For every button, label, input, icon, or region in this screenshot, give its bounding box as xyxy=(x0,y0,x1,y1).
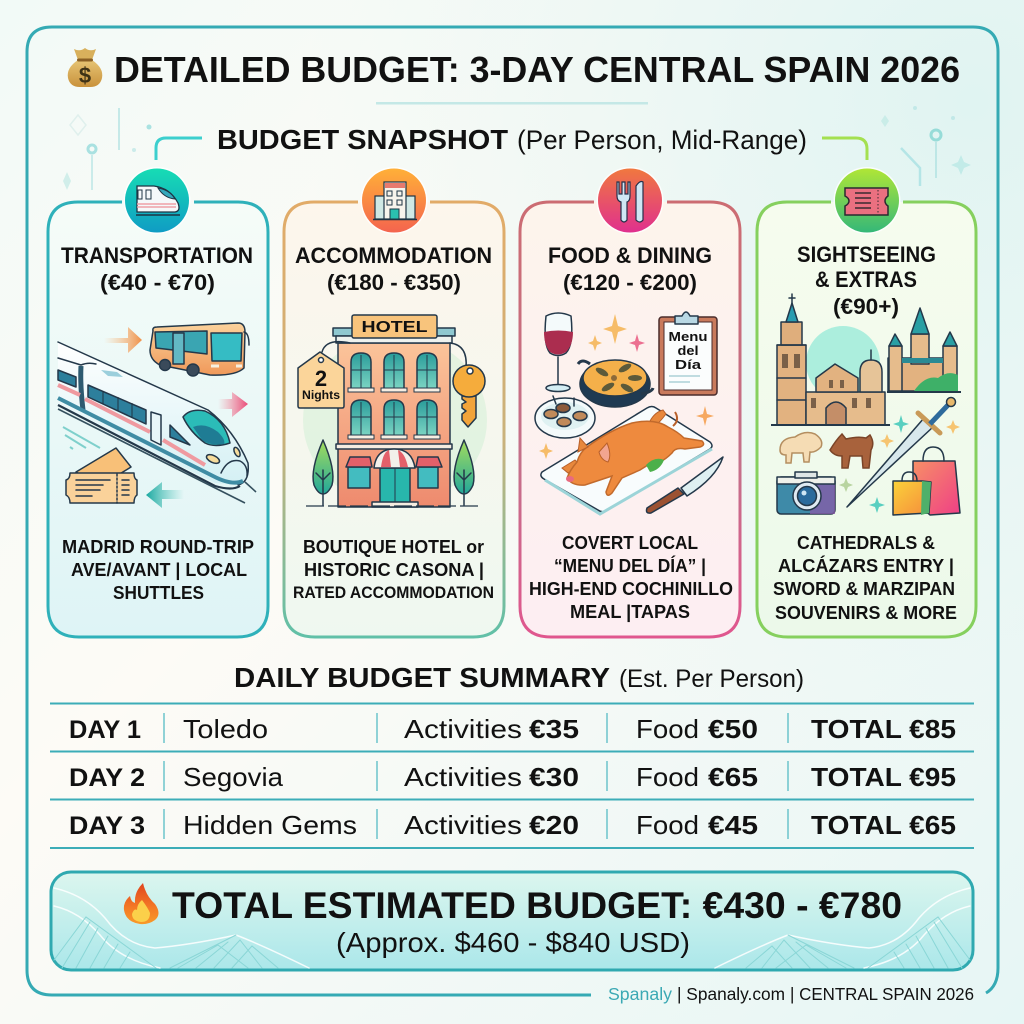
heading connector left xyxy=(156,138,202,160)
description: SOUVENIRS & MORE xyxy=(775,603,957,623)
icon: 2 nights tag xyxy=(298,342,350,408)
description: SHUTTLES xyxy=(113,583,204,603)
category title: FOOD & DINING xyxy=(548,243,712,268)
ground line xyxy=(306,505,482,507)
icon: right tree xyxy=(454,440,474,505)
description: HIGH-END COCHINILLO xyxy=(529,579,733,599)
row: day 3: Food xyxy=(636,810,699,840)
row: day 3: TOTAL €65 xyxy=(811,810,956,840)
total text: TOTAL ESTIMATED BUDGET: €430 - €780 xyxy=(172,885,902,926)
description: “MENU DEL DÍA” | xyxy=(554,555,706,576)
icon: 2 nights tag: 2 xyxy=(315,366,327,391)
description: RATED ACCOMMODATION xyxy=(293,583,494,602)
icon: hotel badge xyxy=(360,167,428,234)
icon: high speed train xyxy=(58,342,256,503)
icon: camera xyxy=(777,472,835,514)
footer xyxy=(608,984,974,1004)
icon: ticket badge xyxy=(834,167,900,234)
row: day 2: DAY 2 xyxy=(69,764,145,792)
description: SWORD & MARZIPAN xyxy=(773,579,955,599)
icon: bus xyxy=(150,323,249,376)
heading: daily budget summary: (Est. Per Person) xyxy=(619,665,804,693)
description: AVE/AVANT | LOCAL xyxy=(71,560,247,580)
row: day 1: Food xyxy=(636,714,699,744)
icon: shopping bags xyxy=(893,447,960,515)
row: day 3: DAY 3 xyxy=(69,812,145,840)
decorative sparks xyxy=(63,106,971,190)
icon: castle xyxy=(887,308,961,392)
description xyxy=(293,537,494,602)
description: MEAL |TAPAS xyxy=(570,602,690,622)
panel: transportation xyxy=(48,167,268,637)
usd approximation: (Approx. $460 - $840 USD) xyxy=(336,927,690,958)
icon: menu clipboard xyxy=(659,312,717,395)
row: day 2: Activities xyxy=(404,762,522,792)
row: day 1: Toledo xyxy=(183,714,268,744)
heading connector right xyxy=(822,138,867,160)
description xyxy=(529,533,733,622)
price range: (€180 - €350) xyxy=(327,270,461,295)
row: day 1: DAY 1 xyxy=(69,716,141,744)
row: day 2: TOTAL €95 xyxy=(811,762,956,792)
panel: sightseeing and extras xyxy=(757,167,976,637)
icon: knife xyxy=(646,457,723,513)
heading: daily budget summary xyxy=(234,662,804,693)
category title xyxy=(797,242,936,292)
description: COVERT LOCAL xyxy=(562,533,698,553)
icon: cochinillo platter xyxy=(541,406,712,514)
icon: marzipan animal light xyxy=(780,433,822,463)
description xyxy=(62,537,254,603)
row: day 3: €20 xyxy=(529,810,579,840)
icon: 2 nights tag: Nights xyxy=(302,390,340,402)
row: day 2: Segovia xyxy=(183,762,284,792)
footer: Spanaly xyxy=(608,984,672,1004)
row: day 1: Activities xyxy=(404,714,522,744)
icon: menu clipboard: del xyxy=(678,343,698,358)
row: day 1: TOTAL €85 xyxy=(811,714,956,744)
heading: budget snapshot: (Per Person, Mid-Range) xyxy=(517,125,807,155)
backdrop circle xyxy=(806,326,880,400)
icon: tickets xyxy=(66,448,137,503)
row: day 2: €65 xyxy=(708,762,758,792)
description: MADRID ROUND-TRIP xyxy=(62,537,254,557)
heading: budget snapshot xyxy=(217,124,807,155)
sparkles xyxy=(839,415,960,513)
icon: sword xyxy=(847,398,956,507)
icon: menu clipboard: Menu xyxy=(668,329,708,344)
row: day 3: Hidden Gems xyxy=(183,810,357,840)
footer: | CENTRAL SPAIN 2026 xyxy=(790,984,974,1004)
icon: cutlery badge xyxy=(596,167,664,234)
row: day 1: €50 xyxy=(708,714,758,744)
sparkles xyxy=(539,314,714,459)
panel: accommodation xyxy=(284,167,504,637)
wave pattern right xyxy=(715,888,970,968)
icon: menu clipboard: Día xyxy=(675,357,702,372)
table: daily budget xyxy=(50,704,974,848)
icon: train badge xyxy=(124,167,190,234)
category title: TRANSPORTATION xyxy=(61,243,253,268)
title xyxy=(68,48,960,90)
description: BOUTIQUE HOTEL or xyxy=(303,537,484,557)
panel: food and dining xyxy=(520,167,740,637)
price range: (€90+) xyxy=(833,294,899,319)
description: CATHEDRALS & xyxy=(797,533,935,553)
row: day 1 xyxy=(69,714,956,744)
footer: | Spanaly.com xyxy=(677,984,785,1004)
panel: total budget xyxy=(51,872,973,970)
category title: SIGHTSEEING xyxy=(797,242,936,267)
icon: hotel building xyxy=(333,315,455,507)
heading: budget snapshot: BUDGET SNAPSHOT xyxy=(217,124,508,155)
icon: tapas plate xyxy=(535,396,595,438)
icon: paella xyxy=(578,360,653,407)
icon: marzipan animal dark xyxy=(830,434,873,468)
row: day 3: €45 xyxy=(708,810,758,840)
icon: wine glass xyxy=(544,313,573,392)
category title: ACCOMMODATION xyxy=(295,243,492,268)
title divider xyxy=(376,102,648,104)
price range: (€120 - €200) xyxy=(563,270,697,295)
backdrop glow xyxy=(303,335,487,505)
heading: daily budget summary: DAILY BUDGET SUMMARY xyxy=(234,662,610,693)
row: day 3 xyxy=(69,810,956,840)
icon: cathedral xyxy=(771,294,890,425)
icon: hotel building: HOTEL xyxy=(362,319,428,336)
icon: money bag: $ xyxy=(79,63,91,88)
row: day 3: Activities xyxy=(404,810,522,840)
arrow: pink xyxy=(218,392,248,417)
arrow: orange xyxy=(104,327,142,353)
description: HISTORIC CASONA | xyxy=(304,560,484,580)
description xyxy=(773,533,957,623)
icon: flame xyxy=(124,883,158,924)
arrow: teal xyxy=(146,482,184,508)
row: day 2: €30 xyxy=(529,762,579,792)
row: day 2 xyxy=(69,762,956,792)
icon: key xyxy=(450,343,485,427)
description: ALCÁZARS ENTRY | xyxy=(778,555,954,576)
title text: DETAILED BUDGET: 3-DAY CENTRAL SPAIN 2026 xyxy=(114,49,960,90)
price range: (€40 - €70) xyxy=(100,270,215,295)
icon: money bag xyxy=(68,48,102,88)
icon: left tree xyxy=(313,440,333,505)
category title: & EXTRAS xyxy=(815,267,917,292)
row: day 2: Food xyxy=(636,762,699,792)
wave pattern left xyxy=(54,888,309,968)
row: day 1: €35 xyxy=(529,714,579,744)
